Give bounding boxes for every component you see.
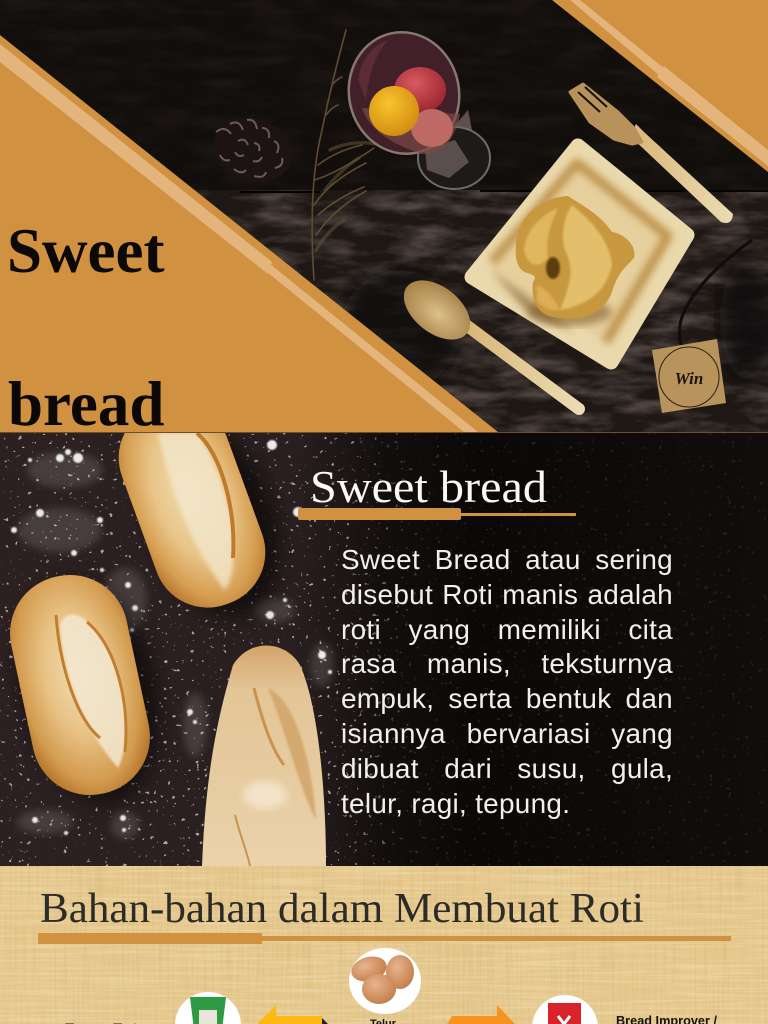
photo: dark wooden table (0, 0, 768, 432)
description paragraph: isiannya bervariasi yang (341, 718, 673, 749)
title: Sweet bread: bread (8, 369, 164, 439)
icon: square wooden plate with croissant (472, 146, 687, 362)
heading: Sweet bread: Sweet bread (310, 462, 547, 512)
description paragraph: roti yang memiliki cita (341, 614, 673, 645)
title: Sweet bread (8, 230, 164, 426)
icon: pine cone (214, 118, 292, 180)
panel: ingredients section (0, 866, 768, 1024)
description paragraph: empuk, serta bentuk dan (341, 683, 673, 714)
description paragraph: telur, ragi, tepung. (341, 788, 570, 819)
description paragraph: Sweet Bread atau sering (341, 544, 673, 575)
ingredient: wheat flour (65, 992, 241, 1024)
heading underline (38, 933, 731, 944)
icon: glass with fruit (348, 31, 491, 190)
description paragraph: dibuat dari susu, gula, (341, 753, 673, 784)
title: Sweet bread: Sweet (7, 216, 164, 286)
decoration: upper right orange band (552, 0, 768, 172)
photo: left bread roll (10, 572, 167, 812)
photo: right bread loaf (202, 645, 326, 866)
flour dust (0, 433, 768, 866)
heading: Bahan-bahan dalam Membuat Roti: Bahan-bahan dalam Membuat Roti (40, 886, 644, 932)
icon: kraft tag with string (652, 240, 752, 413)
ingredient: bread improver (532, 995, 717, 1024)
photo: top bread roll (118, 433, 292, 626)
panel: cover photo and title (0, 0, 768, 439)
description paragraph: rasa manis, teksturnya (341, 648, 673, 679)
tag logo text: Win (675, 369, 703, 388)
ingredient: eggs (349, 948, 421, 1024)
decoration: lower left orange band (0, 35, 498, 432)
panel: sweet bread description background photo (0, 387, 768, 866)
arrow: yellow pointing left (257, 1005, 328, 1024)
arrow: orange pointing right (447, 1005, 515, 1024)
linen background (0, 866, 768, 1024)
heading underline (298, 508, 576, 520)
croissant (516, 196, 634, 326)
description paragraph (341, 544, 673, 819)
icon: wooden spoon (393, 268, 579, 409)
icon: wooden fork (570, 82, 733, 223)
icon: dried plant (312, 30, 376, 280)
description paragraph: disebut Roti manis adalah (341, 579, 673, 610)
